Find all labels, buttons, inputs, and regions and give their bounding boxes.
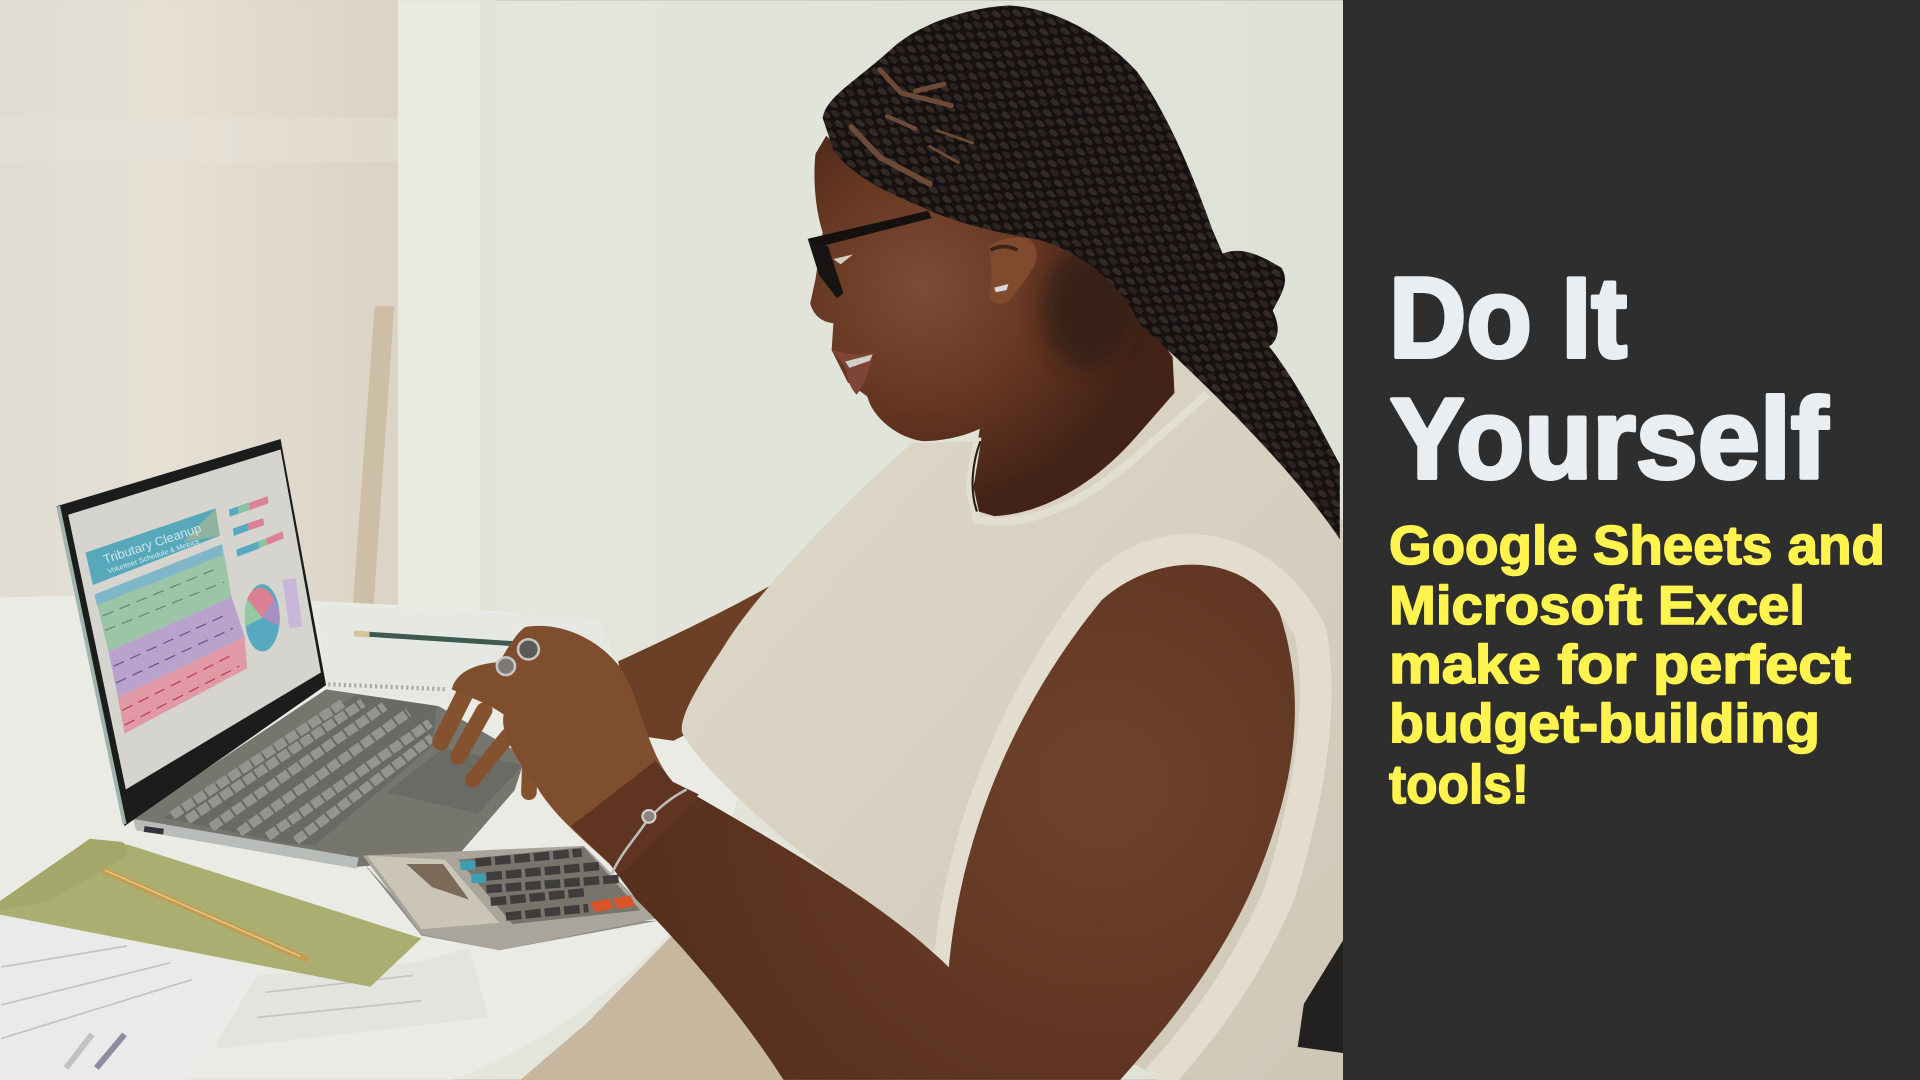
smile — [832, 349, 873, 395]
rings — [497, 639, 539, 675]
notebook and pencil — [317, 605, 621, 706]
spreadsheet title: Tributary Cleanup — [101, 520, 203, 567]
arm — [600, 565, 1295, 1080]
panel: dark text panel — [1343, 0, 1920, 1080]
laptop, papers and calculator on the table — [0, 439, 658, 1080]
subtitle text — [1389, 514, 1885, 815]
subtitle line 2: Microsoft Excel — [1389, 574, 1805, 636]
shirt collar — [969, 394, 1207, 522]
laptop base — [133, 689, 525, 869]
ear and earring — [989, 237, 1037, 304]
bar charts on the screen — [229, 496, 302, 628]
far arm — [618, 578, 808, 741]
title line 2: Yourself — [1390, 376, 1829, 503]
fingers — [441, 689, 530, 792]
gold pen — [105, 870, 305, 959]
subtitle line 1: Google Sheets and — [1389, 514, 1885, 576]
laptop lid and screen — [57, 439, 326, 826]
photo: woman budgeting at a laptop — [0, 0, 1343, 1080]
trousers — [520, 937, 955, 1080]
subtitle line 3: make for perfect — [1389, 633, 1851, 695]
title line 1: Do It — [1389, 255, 1627, 382]
hand and wrist — [441, 626, 699, 875]
subtitle line 5: tools! — [1389, 753, 1529, 815]
bracelet — [611, 789, 687, 875]
calculator — [361, 846, 658, 950]
envelope — [0, 839, 421, 987]
subtitle line 4: budget-building — [1389, 692, 1820, 754]
glasses — [808, 211, 932, 298]
wall and column background — [0, 0, 1343, 1080]
neck and face — [810, 136, 1174, 516]
braided hair — [823, 5, 1340, 539]
spreadsheet on the screen — [86, 508, 247, 734]
paperwork — [0, 912, 489, 1080]
spreadsheet subtitle: Volunteer Schedule & Metrics — [106, 536, 201, 575]
table — [0, 596, 759, 1080]
pie chart on the screen — [245, 584, 280, 651]
head, neck and braids — [808, 5, 1340, 539]
sleeveless shirt — [682, 337, 1343, 1080]
title — [1389, 255, 1829, 503]
